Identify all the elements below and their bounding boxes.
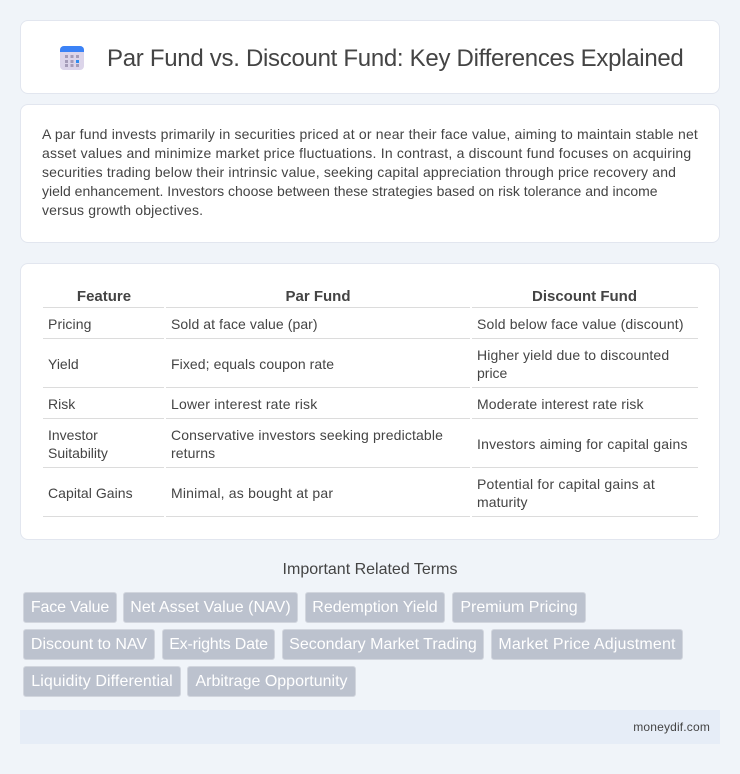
row: capital gains: Capital Gains [48, 485, 133, 501]
tag: Secondary Market Trading [289, 636, 477, 653]
tag [162, 629, 275, 660]
row: risk: Lower interest rate risk [171, 396, 317, 412]
row: capital gains: Potential for capital gains at [477, 476, 655, 492]
intro paragraph: yield enhancement. Investors choose between these strategies based on risk tolerance and income [42, 183, 658, 199]
row: risk: Moderate interest rate risk [477, 396, 644, 412]
intro paragraph: A par fund invests primarily in securities priced at or near their face value, aiming to maintain stable net [42, 126, 698, 142]
row: yield: Fixed; equals coupon rate [171, 356, 334, 372]
row: yield [48, 347, 669, 381]
tag [23, 629, 155, 660]
tag: Discount to NAV [31, 636, 147, 653]
row: investor suitability: Suitability [48, 445, 108, 461]
intro paragraph: versus growth objectives. [42, 202, 203, 218]
tag [23, 666, 181, 697]
tag [23, 592, 117, 623]
tag: Premium Pricing [460, 599, 578, 616]
row: investor suitability [48, 427, 688, 461]
row: capital gains: maturity [477, 494, 528, 510]
tag [305, 592, 445, 623]
row: pricing: Pricing [48, 316, 92, 332]
table header: Par Fund [285, 288, 350, 305]
row: investor suitability: Conservative investors seeking predictable [171, 427, 443, 443]
tag [282, 629, 484, 660]
panel: intro text [20, 104, 720, 243]
table header [77, 288, 637, 305]
row: pricing: Sold below face value (discount) [477, 316, 684, 332]
tags: related terms [23, 592, 683, 697]
row: investor suitability: Investor [48, 427, 98, 443]
table header: Discount Fund [532, 288, 637, 305]
heading: related terms: Important Related Terms [283, 561, 457, 578]
footer source: moneydif.com [633, 720, 710, 734]
row: investor suitability: returns [171, 445, 215, 461]
panel: title card [20, 20, 720, 94]
tag [491, 629, 683, 660]
row: yield: price [477, 365, 507, 381]
tag [452, 592, 586, 623]
tag [123, 592, 298, 623]
row: pricing: Sold at face value (par) [171, 316, 318, 332]
tag: Ex-rights Date [169, 636, 268, 653]
title: Par Fund vs. Discount Fund: Key Differences Explained [107, 45, 684, 72]
row: risk [48, 396, 644, 412]
tag [187, 666, 356, 697]
tag: Market Price Adjustment [498, 636, 676, 653]
row: capital gains: Minimal, as bought at par [171, 485, 333, 501]
panel: comparison table [20, 263, 720, 540]
icon: calendar [60, 46, 84, 70]
intro paragraph: asset values and minimize market price fluctuations. In contrast, a discount fund focuses on acquiring [42, 145, 691, 161]
footer bar [20, 710, 720, 744]
row: capital gains [48, 476, 655, 510]
row: yield: Yield [48, 356, 79, 372]
row: pricing [48, 316, 684, 332]
row: investor suitability: Investors aiming for capital gains [477, 436, 688, 452]
tag: Liquidity Differential [31, 673, 173, 690]
tag: Redemption Yield [312, 599, 438, 616]
intro paragraph: securities trading below their intrinsic value, seeking capital appreciation through price recovery and [42, 164, 676, 180]
table header: Feature [77, 288, 131, 305]
row: risk: Risk [48, 396, 75, 412]
tag: Net Asset Value (NAV) [130, 599, 291, 616]
row: yield: Higher yield due to discounted [477, 347, 669, 363]
tag: Arbitrage Opportunity [195, 673, 348, 690]
intro paragraph [42, 126, 698, 218]
tag: Face Value [31, 599, 109, 616]
